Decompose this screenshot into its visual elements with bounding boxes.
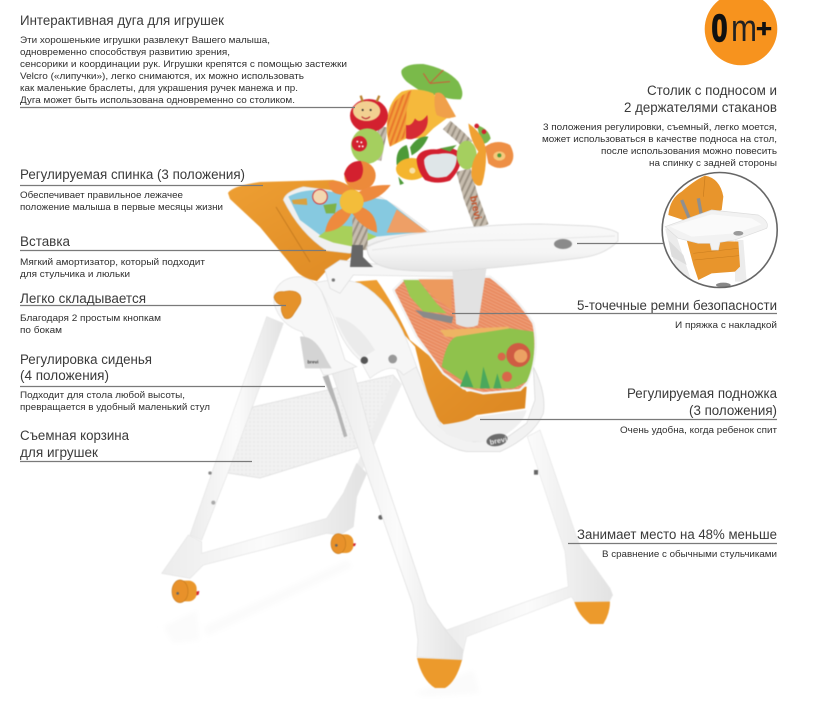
callout: seat adjustment: [20, 352, 325, 413]
callout: insert: [20, 234, 326, 280]
badge: 0m+: m: [731, 8, 757, 50]
callout: footrest: [480, 386, 778, 436]
toy arch: brevi: [467, 195, 483, 221]
callout: space saving: В сравнение с обычными стульчиками: [602, 549, 777, 560]
callout: seat adjustment: Подходит для стола любой высоты,: [20, 390, 185, 401]
callout: tray: [542, 83, 777, 244]
floor reflection: [163, 560, 480, 697]
seat pad: [393, 277, 536, 393]
right front leg and foot: [443, 430, 613, 663]
apple mirror: [417, 148, 461, 183]
callout: adjustable backrest: Регулируемая спинка (3 положения): [20, 167, 245, 182]
callout: toy arch: как маленькие браслеты, для украшения ручек манежа и пр.: [20, 83, 298, 94]
toy basket: [213, 375, 400, 478]
callout: safety harness: 5-точечные ремни безопасности: [577, 298, 777, 313]
badge: 0m+: +: [756, 15, 772, 43]
callout: toy arch: Интерактивная дуга для игрушек: [20, 13, 224, 28]
caterpillar: [350, 99, 388, 132]
tray arm: [325, 260, 453, 293]
butterfly: [457, 141, 477, 169]
callout: footrest: Регулируемая подножка: [627, 386, 777, 401]
callout: seat adjustment: (4 положения): [20, 368, 109, 383]
footrest badge: [485, 432, 509, 448]
callout: removable basket: Съемная корзина: [20, 428, 129, 443]
callout: safety harness: [452, 298, 777, 331]
callout: space saving: Занимает место на 48% меньше: [577, 527, 777, 542]
tray post: [452, 265, 487, 327]
callout: insert: Мягкий амортизатор, который подходит: [20, 257, 206, 268]
callout: folds easily: [20, 291, 286, 336]
badge: 0m+: 0: [712, 8, 728, 50]
callout: insert: для стульчика и люльки: [20, 269, 130, 280]
callout: tray: 2 держателями стаканов: [624, 100, 777, 115]
rear wheels: [172, 471, 383, 603]
left front leg and foot: [332, 365, 463, 688]
seat frame and footrest: brevi: [489, 434, 508, 447]
callout: folds easily: Благодаря 2 простым кнопкам: [20, 313, 161, 324]
tray: [367, 224, 618, 271]
flower: [325, 181, 391, 233]
callout: safety harness: И пряжка с накладкой: [675, 320, 777, 331]
orange seat upholstery: [355, 280, 527, 426]
hub: [274, 277, 357, 375]
callout: adjustable backrest: [20, 167, 263, 213]
toy arch: [360, 125, 483, 250]
callout: toy arch: сенсорики и координации рук. Игрушки крепятся с помощью застежки: [20, 59, 347, 70]
callout: toy arch: Эти хорошенькие игрушки развлекут Вашего малыша,: [20, 35, 270, 46]
callout: tray: Столик с подносом и: [647, 83, 777, 98]
fold button: [274, 291, 301, 319]
callout: tray: 3 положения регулировки, съемный, легко моется,: [543, 122, 777, 133]
callout: seat adjustment: превращается в удобный маленький стул: [20, 402, 210, 413]
central arm: [313, 280, 417, 378]
callout: folds easily: Легко складывается: [20, 291, 146, 306]
callout: adjustable backrest: Обеспечивает правильное лежачее: [20, 190, 183, 201]
callout: toy arch: [20, 13, 355, 108]
callout: space saving: [568, 527, 777, 560]
callout: seat adjustment: Регулировка сиденья: [20, 352, 152, 367]
seat frame and footrest: brevi: [307, 360, 318, 365]
seat frame and footrest: [274, 277, 544, 452]
callout: tray: после использования можно повесить: [601, 146, 777, 157]
rear legs and wheel base: [162, 317, 367, 578]
lion: [387, 90, 451, 147]
callout: footrest: (3 положения): [689, 403, 777, 418]
high chair illustration: [162, 64, 618, 688]
callout: folds easily: по бокам: [20, 325, 62, 336]
callout: footrest: Очень удобна, когда ребенок спит: [620, 425, 778, 436]
rear right leg: [352, 378, 402, 480]
seat pad flowers: [506, 343, 530, 367]
toy clamp: [350, 245, 373, 267]
callout: tray: может использоваться в качестве подноса на стол,: [542, 134, 777, 145]
bird and leaves: [396, 136, 428, 185]
toys: [325, 64, 513, 233]
badge: 0m+: [705, 0, 777, 65]
callout: toy arch: одновременно способствуя развитию зрения,: [20, 47, 230, 58]
callout: insert: Вставка: [20, 234, 70, 249]
backrest: [228, 180, 400, 281]
callout: toy arch: Дуга может быть использована одновременно со столиком.: [20, 95, 295, 106]
callout: removable basket: для игрушек: [20, 445, 98, 460]
bolts: [361, 357, 368, 364]
callout: removable basket: [20, 428, 252, 462]
callout: toy arch: Velcro («липучки»), легко снимаются, их можно использовать: [20, 71, 304, 82]
arch right stem: [463, 170, 482, 227]
callout: adjustable backrest: положение малыша в первые месяцы жизни: [20, 202, 223, 213]
callout: tray: на спинку с задней стороны: [649, 158, 777, 169]
inset: tray on chair back: [662, 172, 777, 288]
backrest shell with insert: [283, 187, 430, 253]
leaf: [401, 64, 462, 99]
